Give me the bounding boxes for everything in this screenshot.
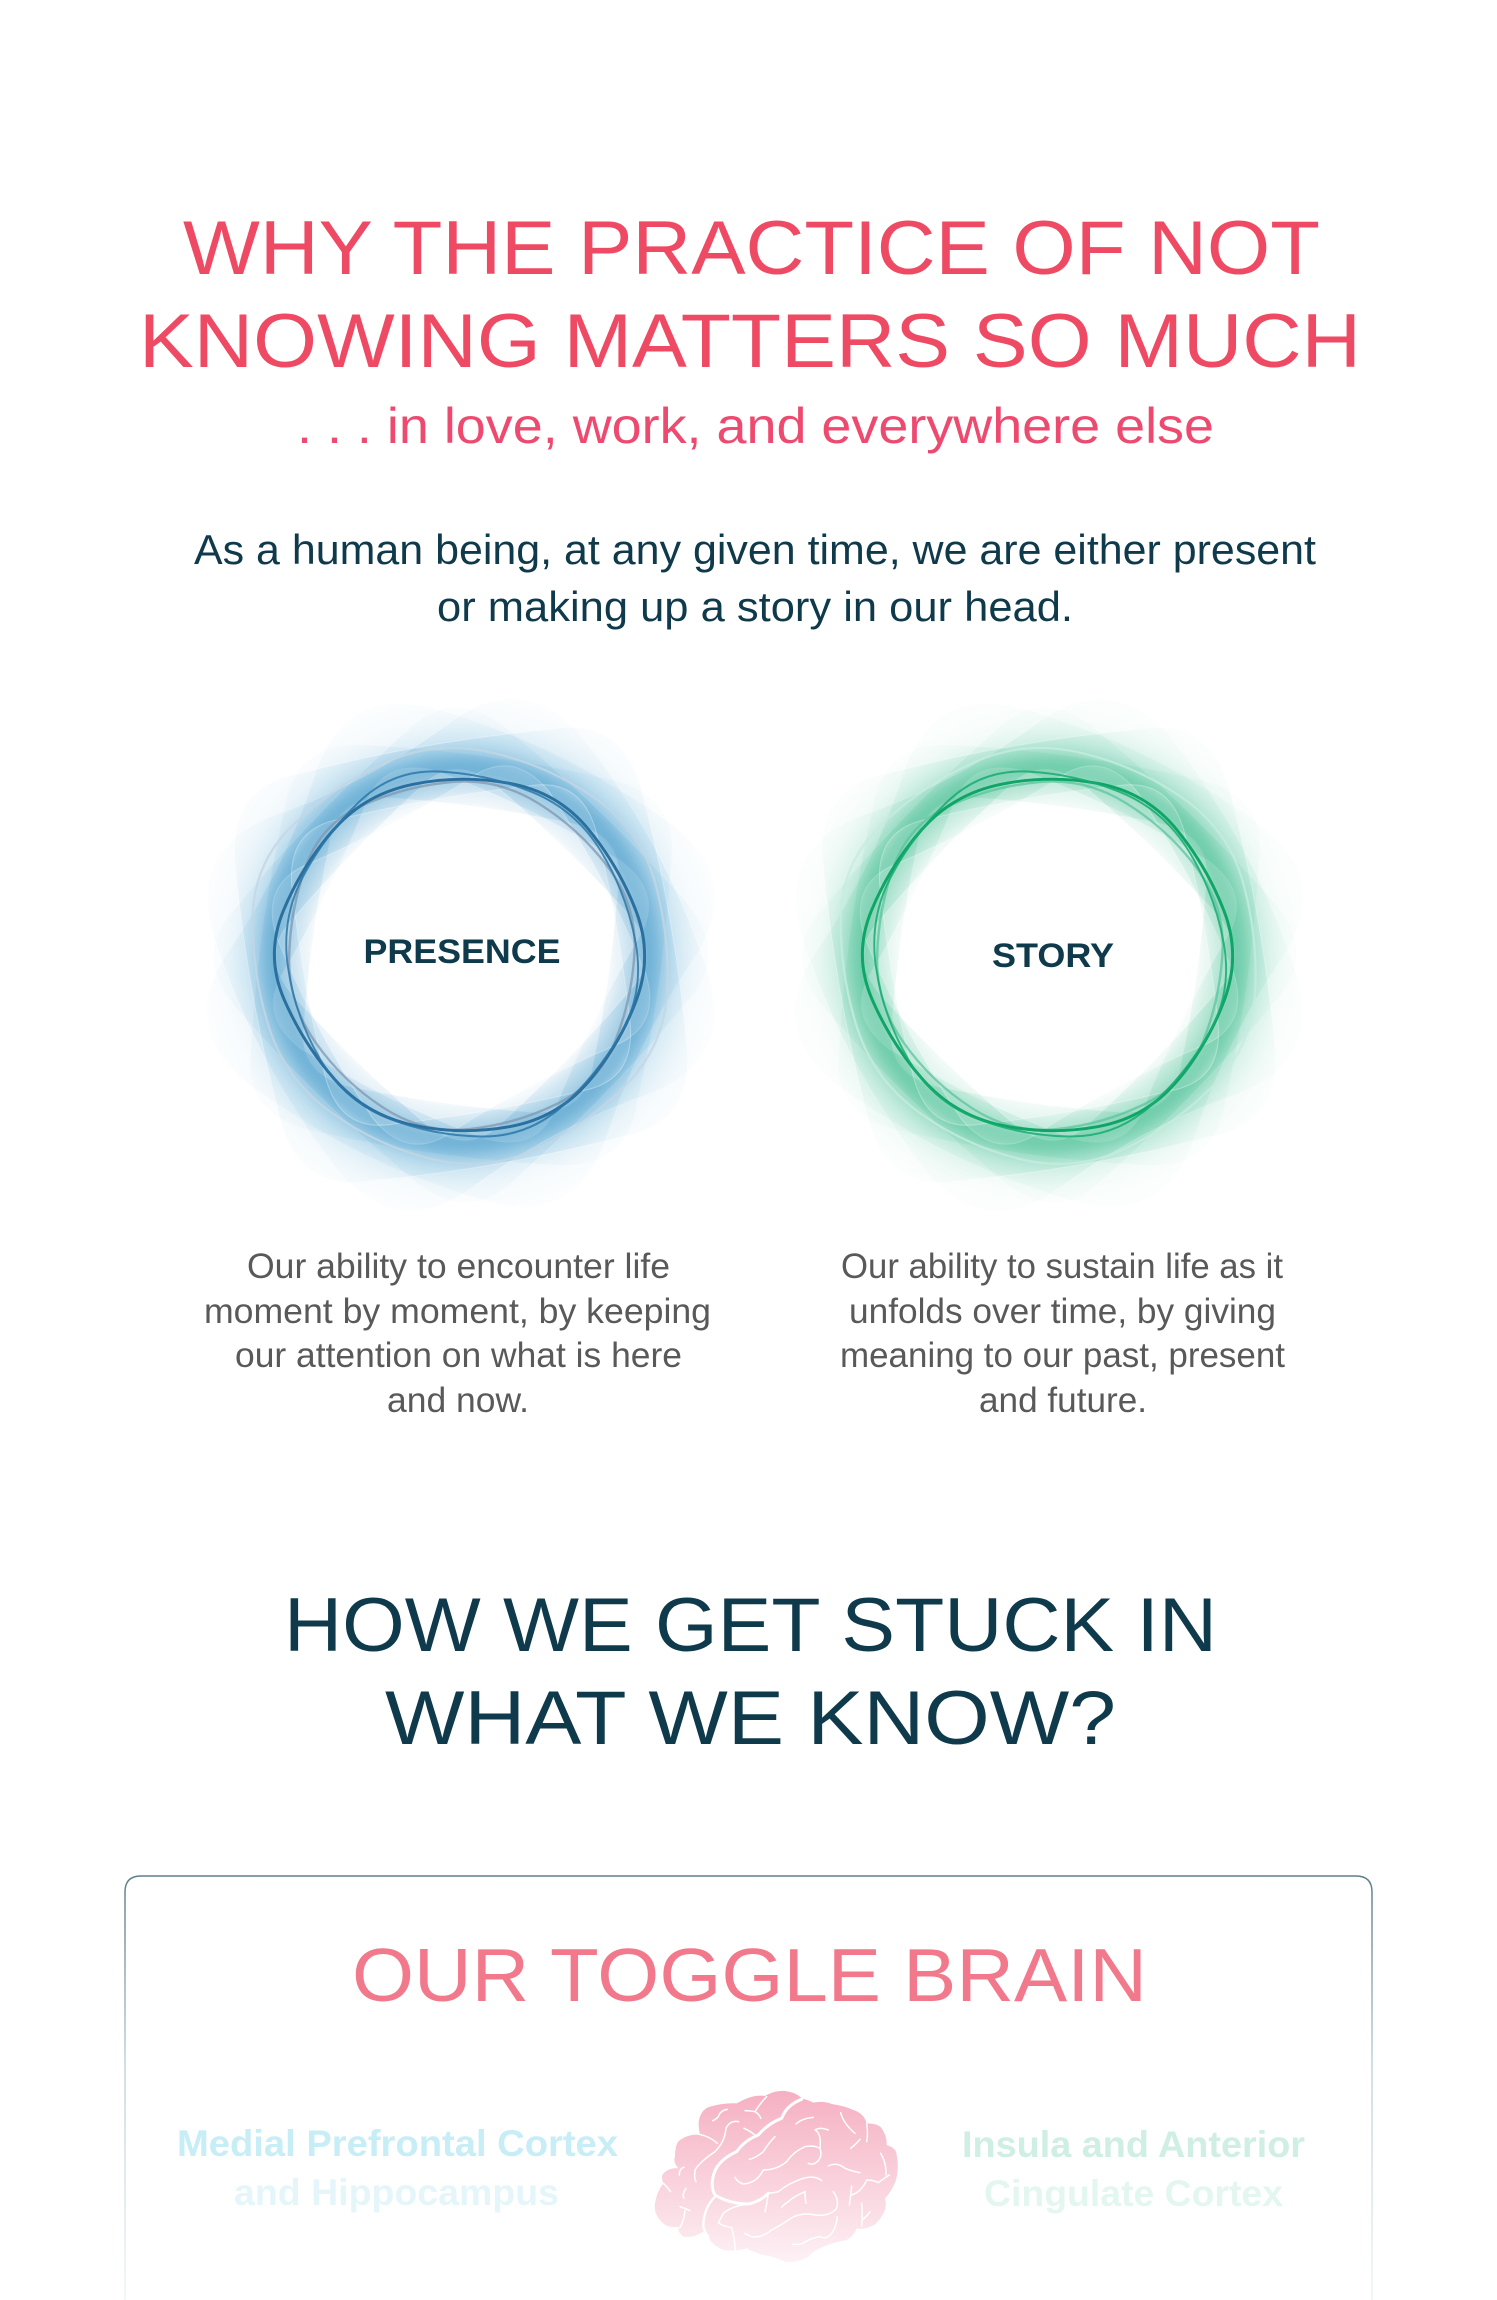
intro text: or making up a story in our head. xyxy=(437,583,1073,630)
caption: story: Our ability to sustain life as it xyxy=(841,1247,1283,1286)
ring lines: presence xyxy=(181,681,738,1227)
label: insula and anterior cingulate cortex: Insula and Anterior xyxy=(962,2124,1305,2165)
label: medial prefrontal cortex xyxy=(177,2123,618,2213)
caption: story: unfolds over time, by giving xyxy=(849,1292,1276,1331)
panel: our toggle brain xyxy=(125,1876,1372,2300)
caption: story: meaning to our past, present xyxy=(840,1336,1285,1375)
label: insula and anterior cingulate cortex xyxy=(962,2124,1305,2214)
intro text xyxy=(194,526,1316,630)
intro text: As a human being, at any given time, we are either present xyxy=(194,526,1316,573)
heading: how we get stuck: HOW WE GET STUCK IN xyxy=(284,1583,1217,1668)
heading: how we get stuck xyxy=(284,1583,1217,1761)
caption: presence: and now. xyxy=(387,1381,529,1420)
subtitle: . . . in love, work, and everywhere else xyxy=(297,398,1214,454)
label: medial prefrontal cortex: Medial Prefrontal Cortex xyxy=(177,2123,618,2164)
ring: story xyxy=(754,663,1344,1247)
caption: presence xyxy=(204,1247,711,1420)
title: KNOWING MATTERS SO MUCH xyxy=(139,299,1361,384)
label: insula and anterior cingulate cortex: Cingulate Cortex xyxy=(984,2173,1283,2214)
ring lines: story xyxy=(769,681,1326,1227)
label: presence: PRESENCE xyxy=(364,933,560,971)
caption: story: and future. xyxy=(979,1381,1147,1420)
icon: brain xyxy=(655,2091,898,2262)
caption: presence: moment by moment, by keeping xyxy=(204,1292,711,1331)
heading: how we get stuck: WHAT WE KNOW? xyxy=(385,1676,1116,1761)
title: WHY THE PRACTICE OF NOT xyxy=(183,206,1320,291)
caption: presence: Our ability to encounter life xyxy=(247,1247,670,1286)
caption: story xyxy=(840,1247,1285,1420)
title xyxy=(139,206,1361,384)
label: medial prefrontal cortex: and Hippocampus xyxy=(234,2172,559,2213)
label: story: STORY xyxy=(992,937,1114,975)
ring: presence xyxy=(166,663,756,1247)
panel heading: OUR TOGGLE BRAIN xyxy=(352,1933,1147,2017)
caption: presence: our attention on what is here xyxy=(235,1336,682,1375)
